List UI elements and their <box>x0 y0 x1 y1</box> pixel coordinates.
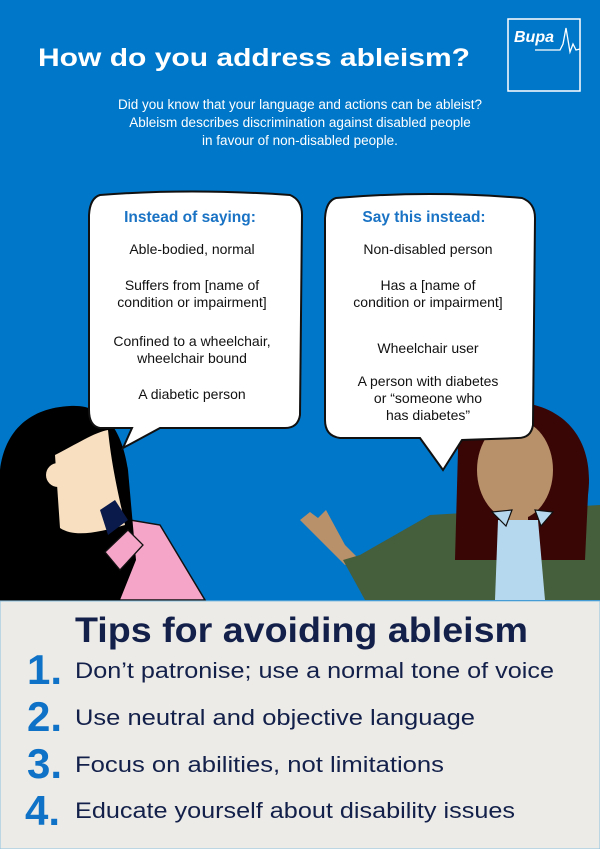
speech bubble: instead of saying: Suffers from [name of <box>125 277 259 293</box>
panel: tips: 2. <box>27 693 62 740</box>
tips heading: Tips for avoiding ableism <box>75 611 528 650</box>
panel: tips: 4. <box>25 787 60 834</box>
intro text <box>118 97 482 148</box>
intro text: Ableism describes discrimination against disabled people <box>129 115 471 130</box>
speech bubble: say this instead: Wheelchair user <box>377 340 479 356</box>
speech bubble: say this instead: Say this instead: <box>362 209 486 226</box>
speech bubble: say this instead: or “someone who <box>374 390 482 406</box>
speech bubble: instead of saying <box>89 192 302 448</box>
speech bubble: instead of saying: A diabetic person <box>138 386 246 402</box>
speech bubble: say this instead <box>325 194 535 470</box>
person: left woman <box>0 406 205 600</box>
speech bubble: instead of saying: Confined to a wheelchair, <box>113 333 271 349</box>
panel: tips: 3. <box>27 740 62 787</box>
speech bubble: say this instead: has diabetes” <box>386 407 470 423</box>
speech bubble: instead of saying: Instead of saying: <box>124 209 256 226</box>
logo: Bupa: Bupa <box>514 29 554 46</box>
panel: tips: Focus on abilities, not limitations <box>75 752 444 777</box>
panel: tips <box>0 601 600 849</box>
speech bubble: instead of saying: wheelchair bound <box>136 350 247 366</box>
speech bubble: instead of saying: Able-bodied, normal <box>129 241 255 257</box>
speech bubble: say this instead: Non-disabled person <box>363 241 493 257</box>
intro text: Did you know that your language and actions can be ableist? <box>118 97 482 112</box>
title: How do you address ableism? <box>38 44 470 72</box>
panel: tips: Use neutral and objective language <box>75 705 475 730</box>
panel: tips: Educate yourself about disability issues <box>75 798 515 823</box>
intro text: in favour of non-disabled people. <box>202 133 398 148</box>
speech bubble: say this instead: Has a [name of <box>381 277 476 293</box>
speech bubble: say this instead: A person with diabetes <box>358 373 498 389</box>
speech bubble: say this instead: condition or impairment] <box>353 294 503 310</box>
panel: tips: 1. <box>27 646 62 693</box>
speech bubble: instead of saying: condition or impairment] <box>117 294 267 310</box>
logo: Bupa <box>508 19 580 91</box>
panel: tips: Don’t patronise; use a normal tone of voice <box>75 658 554 683</box>
person: right woman <box>300 402 600 600</box>
